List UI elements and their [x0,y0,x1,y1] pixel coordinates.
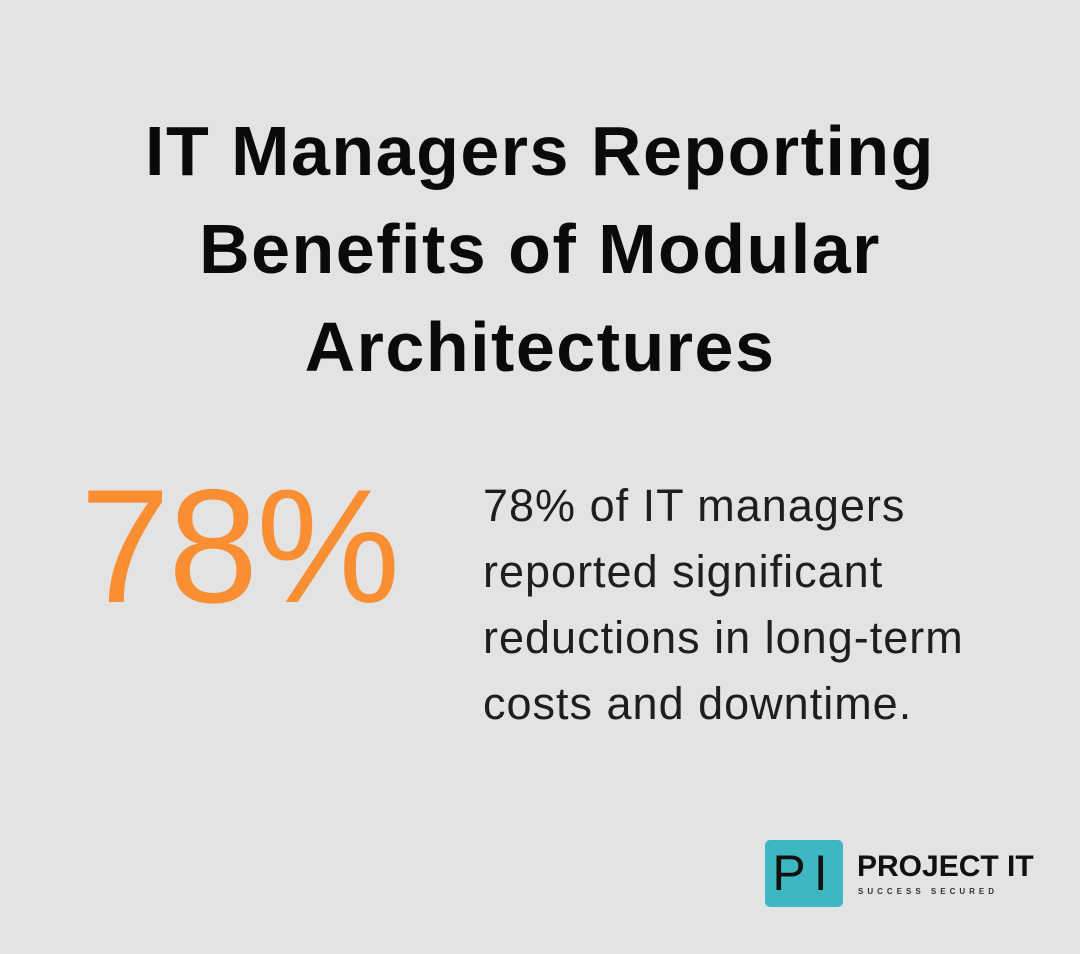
description: reported significant [483,546,883,597]
description [483,480,964,729]
title [145,112,935,386]
description: costs and downtime. [483,678,912,729]
title: Benefits of Modular [199,210,881,288]
logo [765,840,1034,907]
logo mark [765,840,843,907]
title: IT Managers Reporting [145,112,935,190]
big stat: 78% [80,456,398,637]
logo mark: PI [772,845,836,901]
description: reductions in long-term [483,612,964,663]
description: 78% of IT managers [483,480,905,531]
logo name: PROJECT IT [857,850,1034,883]
tagline: SUCCESS SECURED [858,887,998,896]
title: Architectures [305,308,775,386]
